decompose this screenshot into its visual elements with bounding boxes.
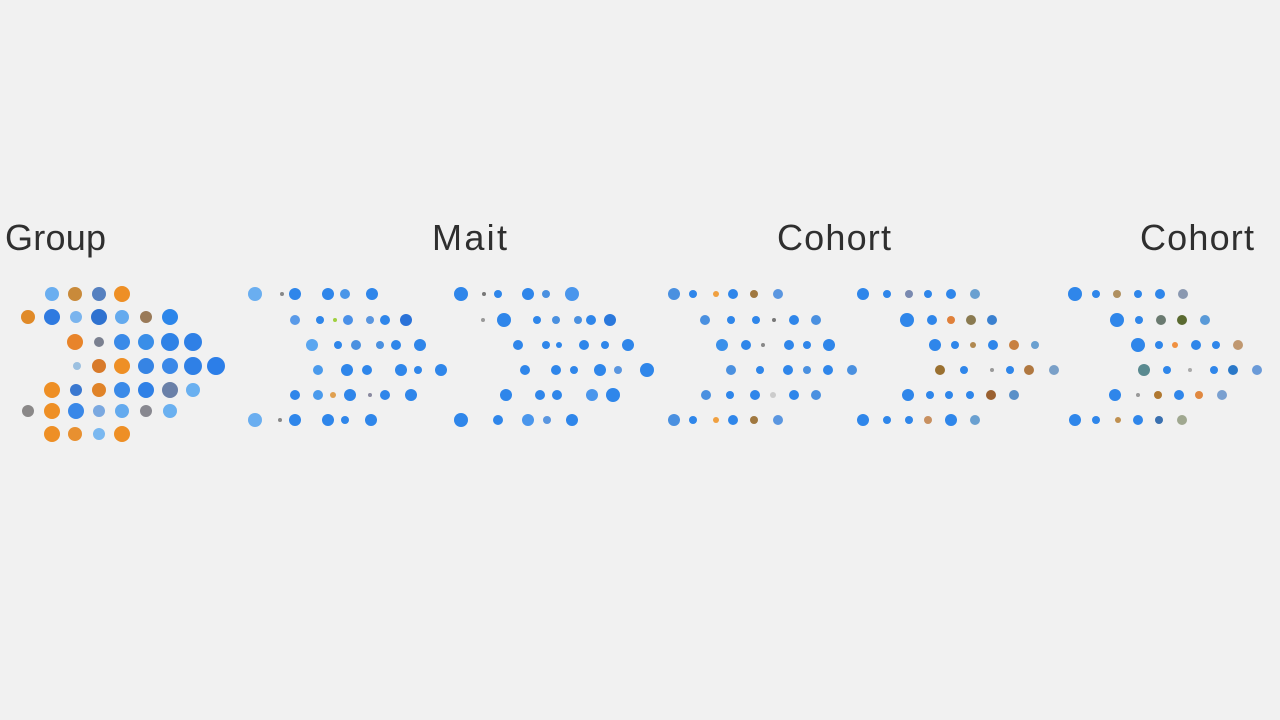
dot cluster: chevron 2 [454, 287, 654, 427]
dot cluster: chevron 5 [1068, 287, 1262, 426]
dot cluster: group arrow [21, 286, 225, 442]
dot cluster: chevron 1 [248, 287, 447, 427]
dot cluster: chevron 4 [857, 288, 1059, 426]
title: Group: Group [5, 217, 106, 258]
title: Mait: Mait [432, 217, 507, 258]
title: Cohort 1: Cohort [777, 217, 891, 258]
title: Cohort 2: Cohort [1140, 217, 1254, 258]
dot cluster: chevron 3 [668, 288, 857, 426]
